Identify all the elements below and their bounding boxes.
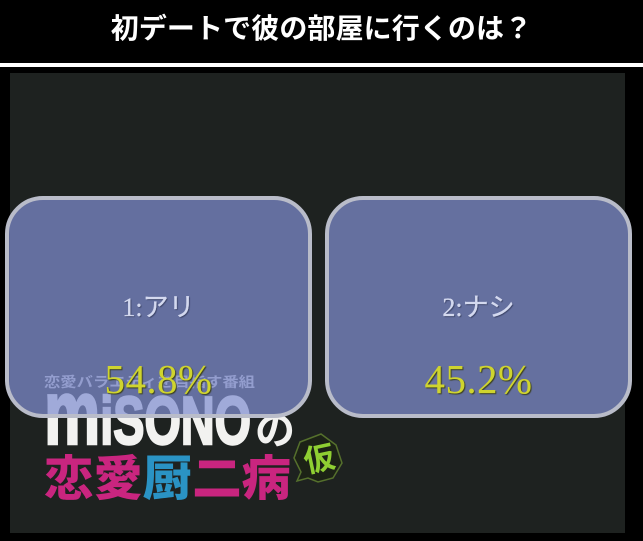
panel: option 2 bbox=[325, 196, 632, 418]
option 1 percentage: 54.8% bbox=[105, 356, 212, 402]
logo: misono show title bbox=[44, 362, 343, 506]
logo pink and blue title: 恋愛厨二病 bbox=[44, 453, 291, 506]
option 1 label: 1:アリ bbox=[122, 293, 195, 322]
option 2 percentage: 45.2% bbox=[425, 356, 532, 402]
panel: option 1 bbox=[5, 196, 312, 418]
logo wordmark: miSONO bbox=[44, 362, 251, 464]
logo tagline: 恋愛バラエティを目指す番組 bbox=[44, 374, 255, 390]
option 2 label: 2:ナシ bbox=[442, 293, 515, 322]
icon: kari speech badge: 仮 bbox=[301, 439, 338, 480]
logo hiragana no: の bbox=[255, 409, 295, 453]
icon: kari speech badge bbox=[294, 434, 342, 482]
title divider bbox=[0, 63, 643, 67]
title: 初デートで彼の部屋に行くのは？ bbox=[111, 13, 532, 44]
